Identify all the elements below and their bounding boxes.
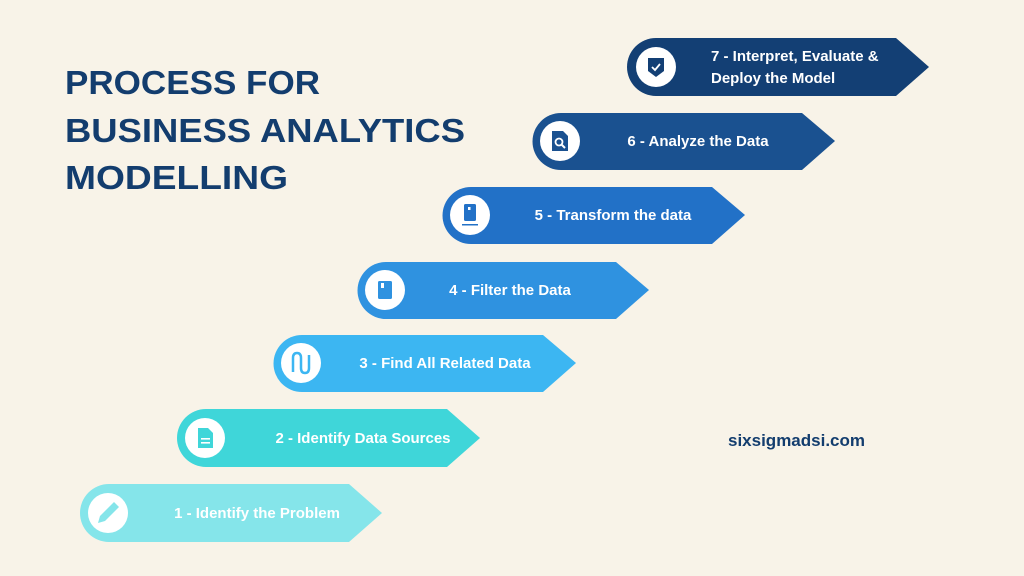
icon: shield check: [636, 47, 676, 87]
step 5 arrow: 5 - Transform the data: [535, 207, 692, 224]
step 4 arrow: 4 - Filter the Data: [449, 282, 571, 299]
website url: sixsigmadsi.com: [728, 431, 865, 450]
icon: pencil: [88, 493, 128, 533]
step 2 arrow: [177, 409, 480, 467]
step 7 arrow: [627, 38, 929, 96]
title: MODELLING: [65, 159, 288, 196]
title: [65, 64, 465, 196]
step 1 arrow: 1 - Identify the Problem: [174, 505, 340, 522]
icon: flow arrows: [281, 343, 321, 383]
step 2 arrow: 2 - Identify Data Sources: [275, 430, 451, 447]
icon: document: [185, 418, 225, 458]
step 7 arrow: 7 - Interpret, Evaluate &: [711, 48, 879, 65]
title: BUSINESS ANALYTICS: [65, 112, 465, 149]
title: PROCESS FOR: [65, 64, 320, 101]
step 6 arrow: [532, 113, 835, 170]
icon: book: [365, 270, 405, 310]
icon: search document: [540, 121, 580, 161]
step 5 arrow: [443, 187, 745, 244]
step 3 arrow: [274, 335, 576, 392]
step 6 arrow: 6 - Analyze the Data: [627, 133, 769, 150]
step 1 arrow: [80, 484, 382, 542]
icon: device: [450, 195, 490, 235]
step 7 arrow: Deploy the Model: [711, 70, 835, 87]
step 4 arrow: [358, 262, 649, 319]
step 3 arrow: 3 - Find All Related Data: [359, 355, 531, 372]
